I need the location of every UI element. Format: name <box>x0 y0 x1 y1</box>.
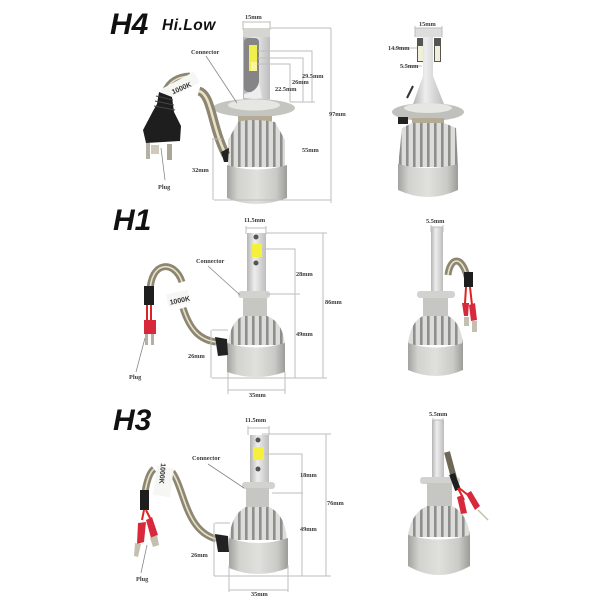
H1 right dimension <box>426 218 445 232</box>
H1 right dimension: 5.5mm <box>426 218 445 225</box>
H1 left dimensions: 26mm <box>188 353 206 360</box>
H1 left bulb <box>227 233 285 377</box>
H1 left dimensions: 28mm <box>296 271 314 278</box>
H4 left dimensions: 32mm <box>192 167 210 174</box>
H3 left dimensions: 11.5mm <box>245 417 267 424</box>
H4 left dimensions: Plug <box>158 184 171 191</box>
H4 right dimensions: 14.9mm <box>388 45 410 52</box>
H1 right cable and plug <box>448 261 477 332</box>
H4 right bulb <box>392 28 464 197</box>
title: H4 Hi.Low <box>110 8 216 41</box>
H4 left cable and plug <box>143 72 229 162</box>
H3 right dimension <box>429 411 448 425</box>
title: H4 Hi.Low: Hi.Low <box>162 17 216 34</box>
H1 left dimensions: 35mm <box>249 392 267 399</box>
H4 left dimensions: 22.5mm <box>275 86 297 93</box>
H3 left dimensions: 35mm <box>251 591 269 598</box>
H4 left dimensions: 15mm <box>245 14 263 21</box>
H1 right bulb <box>408 227 463 376</box>
H4 right dimensions <box>388 21 442 70</box>
H1 left cable and plug: 1000K <box>169 296 191 307</box>
H3 left dimensions <box>136 417 345 598</box>
H1 left dimensions <box>129 217 343 399</box>
H3 left dimensions: 76mm <box>327 500 345 507</box>
H3 right cable and plug <box>447 452 488 520</box>
H4 right dimensions: 15mm <box>419 21 437 28</box>
H3 left dimensions: 26mm <box>191 552 209 559</box>
title: H4 Hi.Low: H4 <box>110 8 149 41</box>
H4 left dimensions: Connector <box>191 49 220 56</box>
H4 left dimensions: 55mm <box>302 147 320 154</box>
H3 left cable and plug <box>134 463 229 557</box>
H4 left bulb <box>213 28 295 204</box>
H3 left dimensions: Connector <box>192 455 221 462</box>
H1 left dimensions: 86mm <box>325 299 343 306</box>
H3 left dimensions: 18mm <box>300 472 318 479</box>
H3 left dimensions: Plug <box>136 576 149 583</box>
H3 right dimension: 5.5mm <box>429 411 448 418</box>
H3 left bulb <box>229 435 288 574</box>
title: H3: H3 <box>113 404 152 437</box>
H4 left dimensions: 26mm <box>292 79 310 86</box>
H3 left dimensions: 49mm <box>300 526 318 533</box>
H3 left cable and plug: 1000K <box>157 463 166 484</box>
H1 left dimensions: 11.5mm <box>244 217 266 224</box>
H4 left dimensions: 97mm <box>329 111 347 118</box>
H1 left dimensions: 49mm <box>296 331 314 338</box>
H3 right bulb <box>408 420 470 575</box>
H4 left dimensions <box>158 14 347 203</box>
H4 right dimensions: 5.5mm <box>400 63 419 70</box>
H1 left cable and plug <box>144 267 228 356</box>
H4 left dimensions: 29.5mm <box>302 73 324 80</box>
title: H1: H1 <box>113 204 151 237</box>
H4 left cable and plug: 1000K <box>171 81 193 96</box>
H1 left dimensions: Connector <box>196 258 225 265</box>
H1 left dimensions: Plug <box>129 374 142 381</box>
